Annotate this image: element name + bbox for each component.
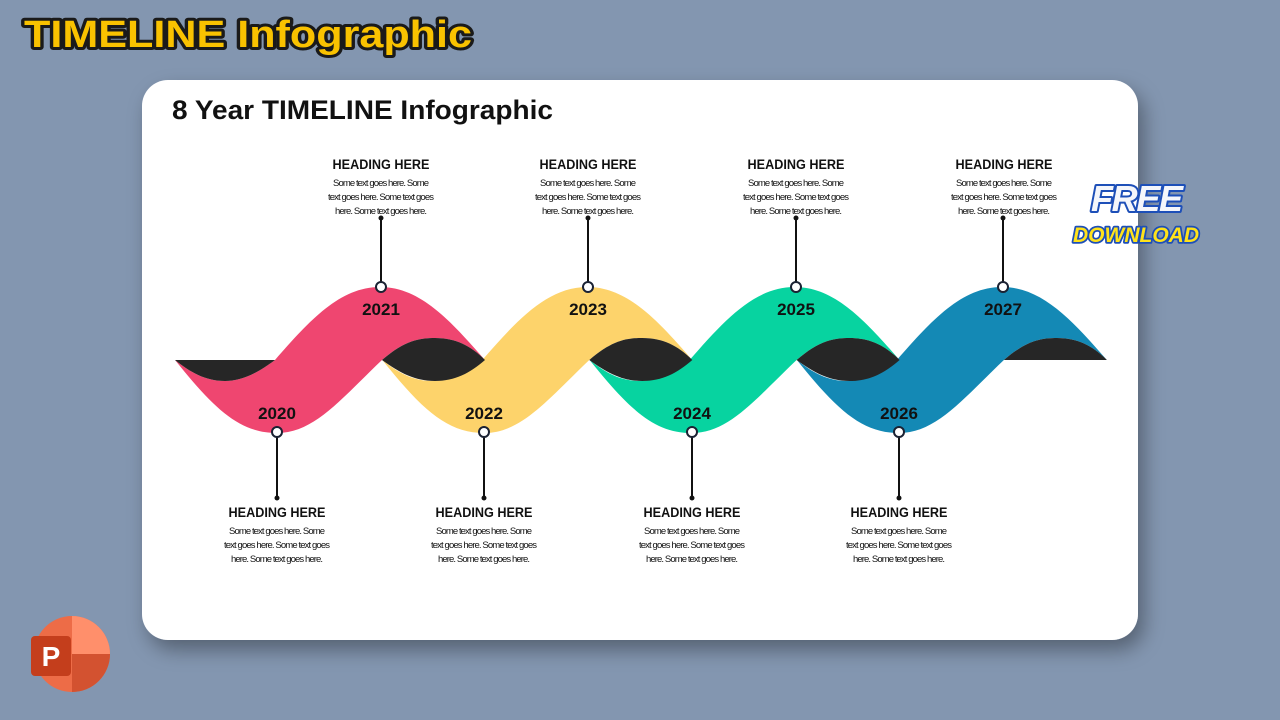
top text blocks: Some text goes here. Some [333, 178, 429, 189]
bottom text blocks: HEADING HERE [228, 505, 326, 520]
top text blocks: here. Some text goes here. [750, 206, 842, 217]
top text blocks: text goes here. Some text goes [951, 192, 1057, 203]
bottom text blocks: Some text goes here. Some [851, 526, 947, 537]
icon: powerpoint [31, 616, 110, 692]
main title: TIMELINE Infographic [24, 14, 472, 56]
bottom text blocks: text goes here. Some text goes [639, 540, 745, 551]
year labels: 2027 [984, 300, 1022, 319]
year labels: 2025 [777, 300, 815, 319]
bottom text blocks: text goes here. Some text goes [224, 540, 330, 551]
top text blocks: Some text goes here. Some [956, 178, 1052, 189]
year labels: 2022 [465, 404, 503, 423]
card heading: 8 Year TIMELINE Infographic [172, 95, 553, 125]
pins [272, 216, 1008, 500]
top text blocks: HEADING HERE [540, 157, 636, 172]
year labels: 2021 [362, 300, 400, 319]
bottom text blocks: here. Some text goes here. [853, 554, 945, 565]
top text blocks: here. Some text goes here. [542, 206, 634, 217]
bottom text blocks: HEADING HERE [850, 505, 948, 520]
top text blocks: HEADING HERE [748, 157, 844, 172]
top text blocks [328, 157, 1057, 217]
year labels: 2024 [673, 404, 711, 423]
free download badge: FREE [1091, 178, 1184, 219]
top text blocks: Some text goes here. Some [540, 178, 636, 189]
bottom text blocks: text goes here. Some text goes [846, 540, 952, 551]
top text blocks: text goes here. Some text goes [743, 192, 849, 203]
bottom text blocks: here. Some text goes here. [231, 554, 323, 565]
top text blocks: HEADING HERE [332, 157, 430, 172]
bottom text blocks: Some text goes here. Some [644, 526, 740, 537]
top text blocks: text goes here. Some text goes [535, 192, 641, 203]
bottom text blocks: Some text goes here. Some [436, 526, 532, 537]
bottom text blocks: HEADING HERE [436, 505, 532, 520]
year labels: 2023 [569, 300, 607, 319]
top text blocks: text goes here. Some text goes [328, 192, 434, 203]
bottom text blocks: text goes here. Some text goes [431, 540, 537, 551]
year labels: 2020 [258, 404, 296, 423]
bottom text blocks: Some text goes here. Some [229, 526, 325, 537]
top text blocks: here. Some text goes here. [335, 206, 427, 217]
wave ribbon [175, 287, 1107, 433]
icon: powerpoint: P [42, 641, 60, 672]
bottom text blocks: here. Some text goes here. [438, 554, 530, 565]
free download badge [1073, 178, 1199, 247]
bottom text blocks: here. Some text goes here. [646, 554, 738, 565]
top text blocks: here. Some text goes here. [958, 206, 1050, 217]
free download badge: DOWNLOAD [1073, 224, 1199, 247]
year labels [258, 300, 1022, 423]
year labels: 2026 [880, 404, 918, 423]
top text blocks: Some text goes here. Some [748, 178, 844, 189]
bottom text blocks: HEADING HERE [644, 505, 740, 520]
panel: card [142, 80, 1138, 640]
bottom text blocks [224, 505, 952, 565]
top text blocks: HEADING HERE [956, 157, 1052, 172]
